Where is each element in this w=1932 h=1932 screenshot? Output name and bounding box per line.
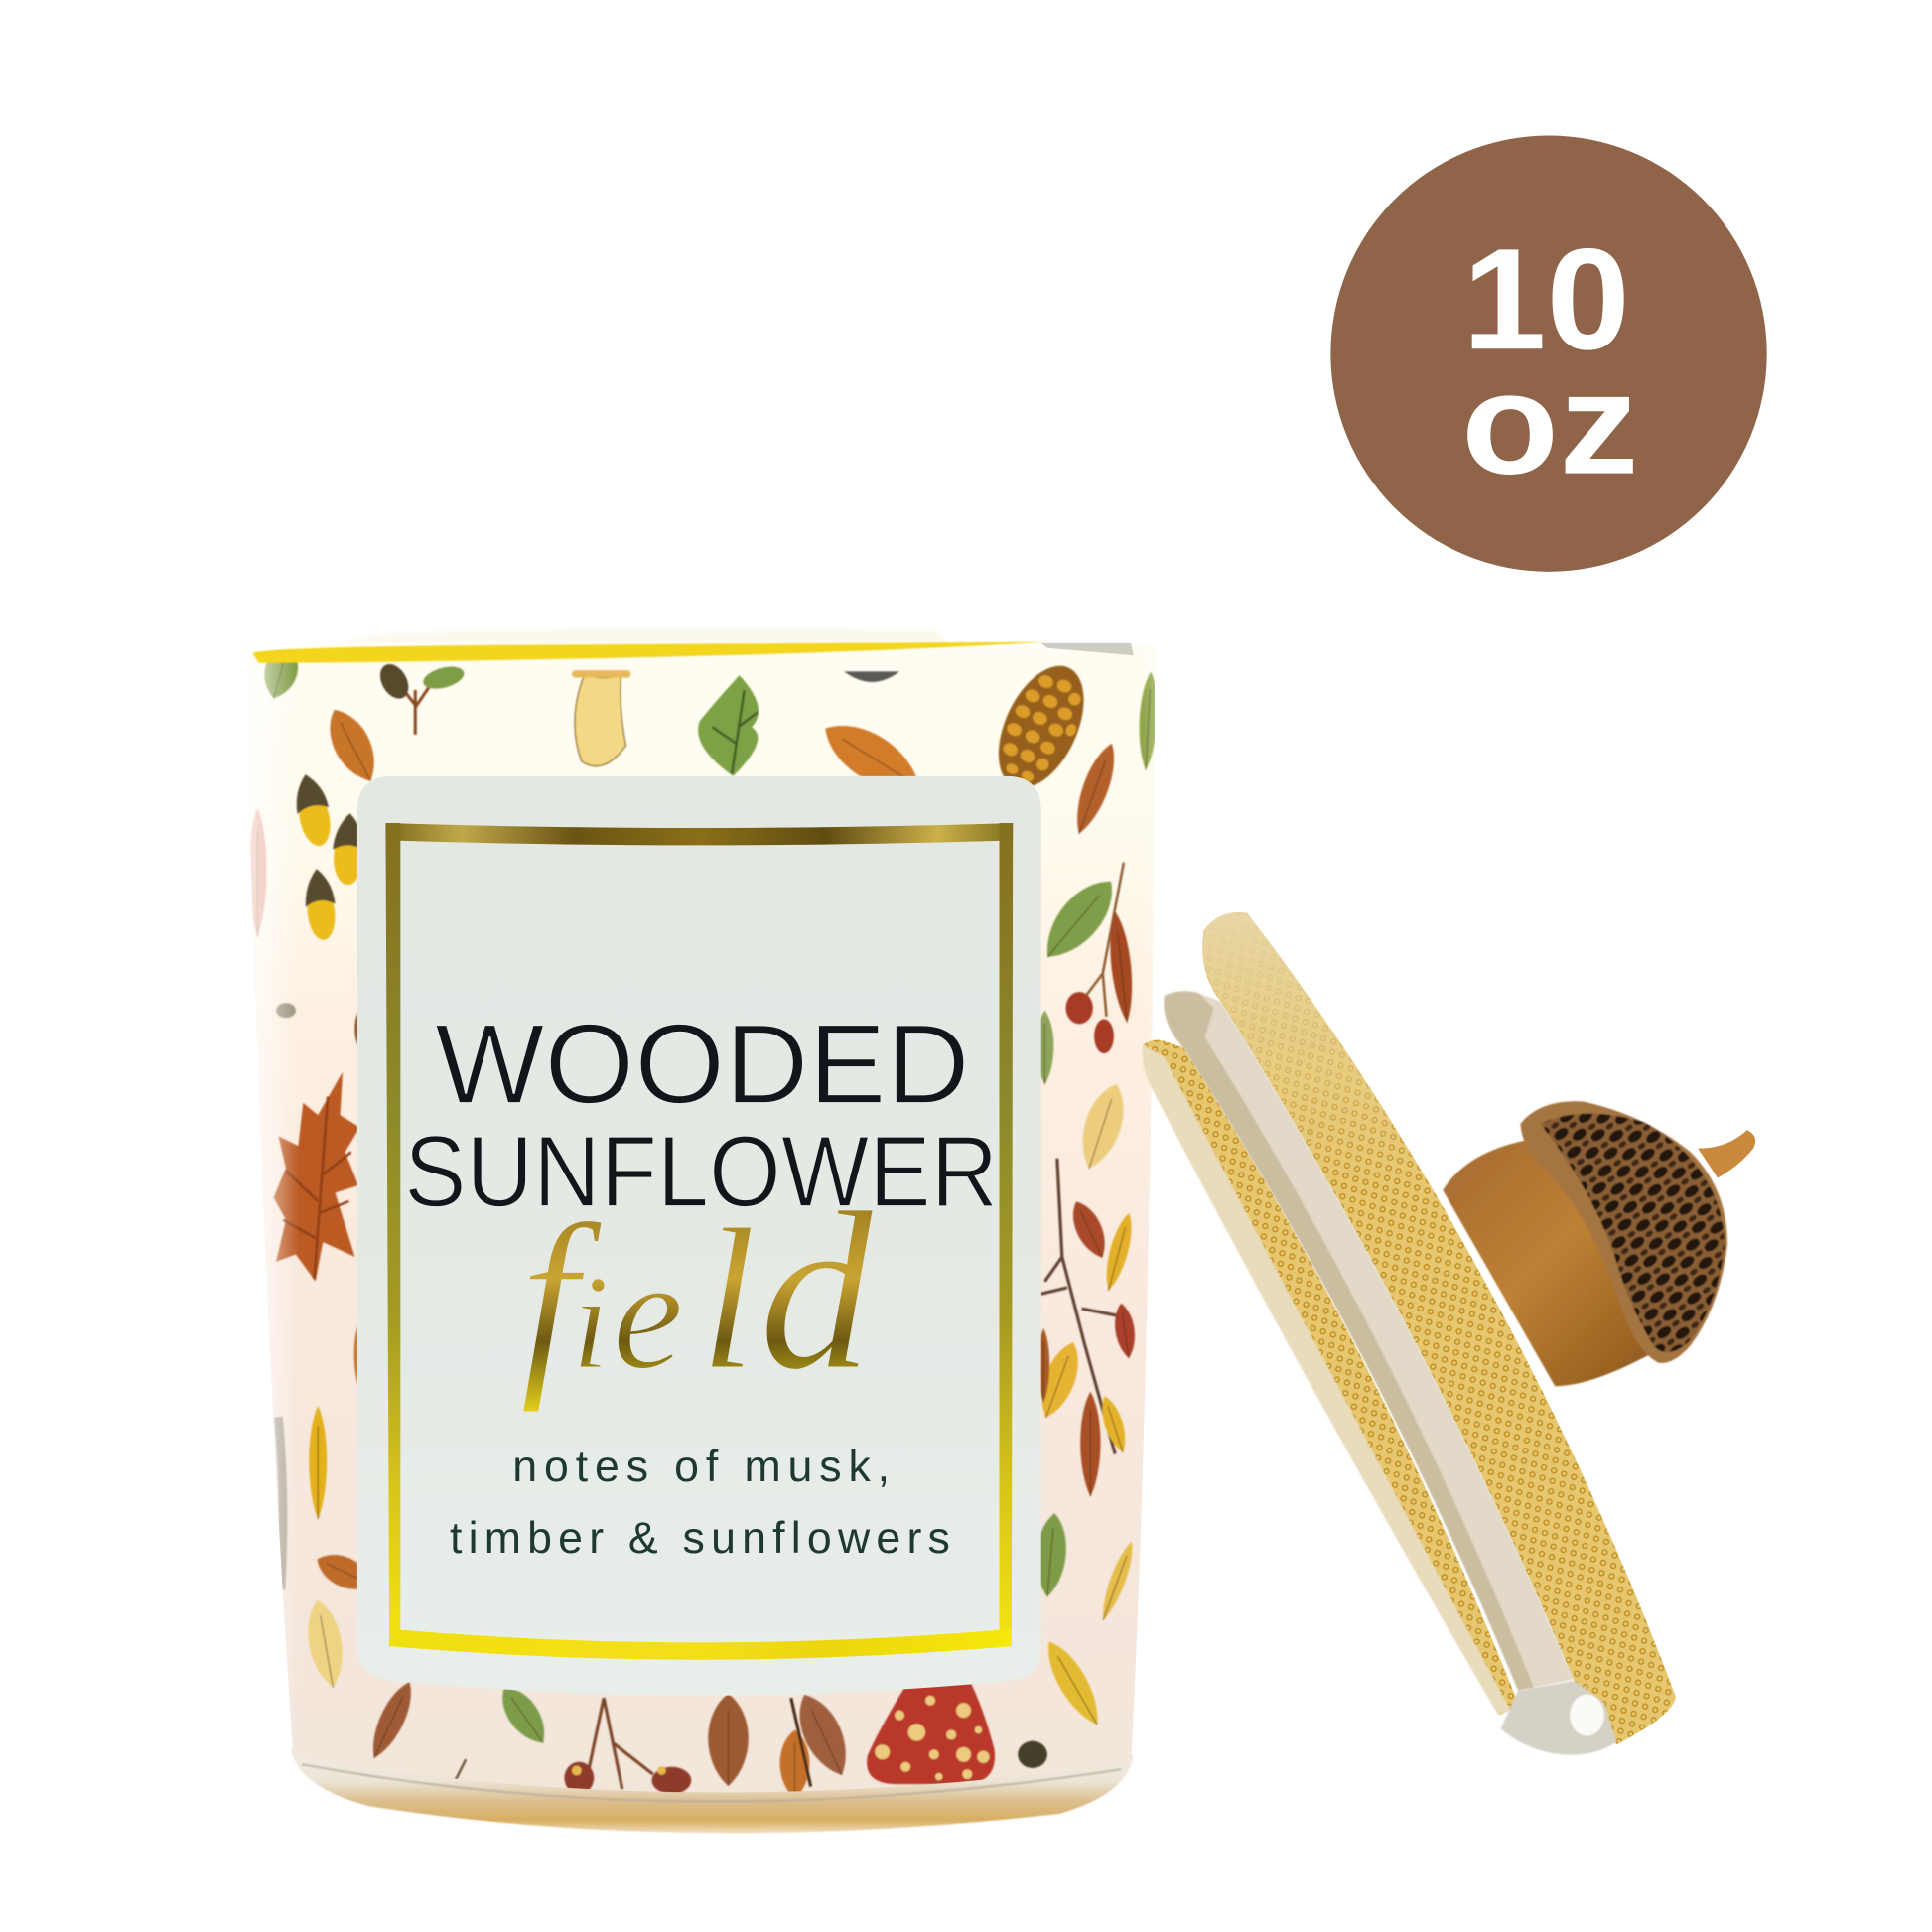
acorns xyxy=(290,771,366,941)
lower bamboo ring xyxy=(1143,1039,1518,1716)
title: WOODED SUNFLOWER xyxy=(404,1002,998,1228)
oak leaf green xyxy=(698,675,759,776)
script word: field: d xyxy=(759,1165,874,1418)
title: WOODED SUNFLOWER: SUNFLOWER xyxy=(404,1115,998,1228)
wax peeking above the rim xyxy=(345,628,949,643)
pine cone xyxy=(997,665,1085,786)
badge: 10 oz: 10 xyxy=(1462,218,1630,379)
small dark bud xyxy=(276,1003,296,1018)
title: WOODED SUNFLOWER: WOODED xyxy=(435,1002,970,1128)
dark half-round berry xyxy=(844,671,899,682)
twig with two leaves xyxy=(374,659,467,735)
lid with acorn knob xyxy=(1143,912,1755,1755)
acorn cap xyxy=(1520,1101,1727,1363)
candle jar xyxy=(234,628,1171,1833)
orange leaves xyxy=(329,709,375,782)
highlight in seal end xyxy=(1570,1694,1604,1736)
script word: field: i xyxy=(572,1247,610,1398)
gold foil frame xyxy=(385,823,1013,1660)
pale outer edge of ring xyxy=(1143,1044,1511,1716)
dark acorn bug xyxy=(1018,1741,1047,1768)
acorn nut xyxy=(1443,1140,1691,1386)
pale top of the plate xyxy=(1202,912,1676,1744)
scent notes xyxy=(450,1443,950,1563)
berry branch xyxy=(564,1698,691,1794)
glass rim highlight xyxy=(1041,643,1134,655)
jar wrap with autumn pattern xyxy=(234,640,1171,1824)
badge: 10 oz xyxy=(1330,136,1767,572)
pale yellow oak leaf xyxy=(1082,1083,1124,1170)
script word: field: f xyxy=(520,1181,603,1414)
left side leaves xyxy=(309,1406,327,1519)
small green edge leaf xyxy=(1040,1010,1054,1085)
maple leaf xyxy=(274,1072,359,1282)
leaf: top left green xyxy=(264,650,300,699)
right side lower leaves xyxy=(1040,1513,1067,1598)
label xyxy=(357,776,1041,1696)
glass base xyxy=(291,1747,1134,1833)
bottom leaves xyxy=(371,1682,412,1759)
left bottom sprout xyxy=(454,1759,466,1784)
red spotted mushroom xyxy=(867,1676,995,1784)
script word: field: l xyxy=(700,1188,757,1413)
faint red leaf at the left edge xyxy=(248,808,266,937)
soft edges xyxy=(246,650,1155,1595)
scent notes: timber & sunflowers xyxy=(450,1514,950,1563)
badge: 10 oz: oz xyxy=(1461,344,1639,504)
script word: field: e xyxy=(613,1225,683,1403)
acorn stem xyxy=(1698,1130,1755,1177)
dark brown edge bud xyxy=(354,1012,364,1046)
branch with autumn leaves xyxy=(1033,1159,1138,1496)
outer bamboo plate xyxy=(1202,912,1676,1744)
silicone seal xyxy=(1164,991,1574,1691)
yellow rim xyxy=(252,642,1047,663)
green leaf, berries and brown leaf on the right xyxy=(1033,863,1137,1053)
mushroom stem xyxy=(572,670,630,766)
scent notes: notes of musk, xyxy=(512,1443,890,1491)
seal end below lid xyxy=(1501,1681,1616,1755)
